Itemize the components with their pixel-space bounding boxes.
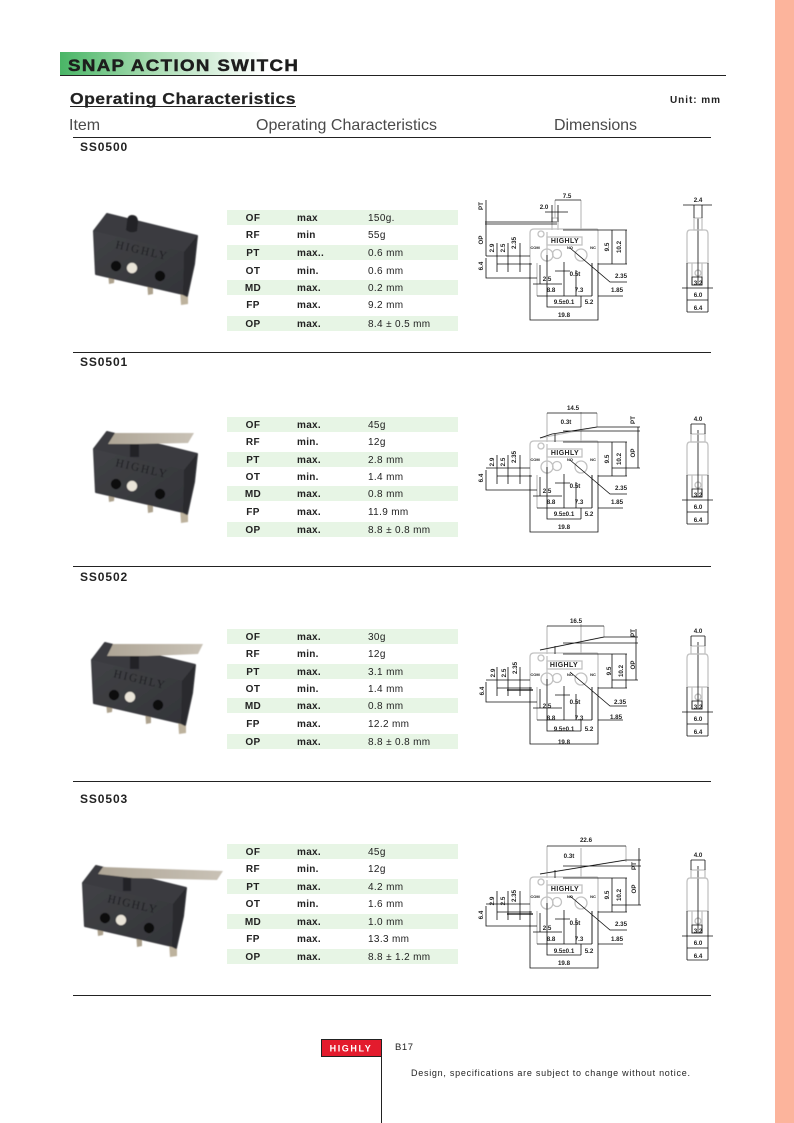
spec table: FP (246, 719, 260, 730)
dimension drawing: front: 2.9 (490, 668, 497, 677)
dimension drawing: front: 9.5 (604, 890, 611, 899)
spec table: OF (246, 420, 260, 431)
spec table: 13.3 mm (368, 934, 409, 945)
product: SS0503 (80, 792, 713, 968)
dimension drawing: front: OP (478, 236, 485, 244)
spec table: min. (297, 864, 319, 875)
model label: SS0500 (80, 140, 128, 154)
dimension drawing: front: 0.3t (561, 419, 571, 426)
dimension drawing: front: 10.2 (616, 452, 623, 465)
dimension drawing: front: OP (631, 885, 638, 893)
spec table: min. (297, 684, 319, 695)
dimension drawing: front: 2.5 (543, 276, 552, 283)
section title: Operating Characteristics (70, 90, 296, 108)
dimension drawing: front: 6.4 (478, 261, 485, 270)
spec table: 0.8 mm (368, 701, 403, 712)
dimension drawing: front: 1.85 (610, 714, 623, 721)
spec table: min. (297, 649, 319, 660)
spec table: min. (297, 437, 319, 448)
dimension drawing: front: 1.85 (611, 936, 624, 943)
disclaimer: Design, specifications are subject to change without notice. (411, 1068, 690, 1078)
spec table: MD (245, 489, 261, 500)
spec table: PT (246, 882, 260, 893)
spec table: max. (297, 917, 321, 928)
dimension drawing: front: 2.35 (615, 921, 628, 928)
banner heading: SNAP ACTION SWITCH (68, 56, 298, 75)
photo: switch with plunger: HIGHLY (114, 239, 168, 263)
spec table: 8.4 ± 0.5 mm (368, 319, 430, 330)
dimension drawing: side (682, 416, 713, 524)
dimension drawing: side: 3.2 (694, 492, 703, 499)
spec table: 2.8 mm (368, 455, 403, 466)
spec table: MD (245, 917, 261, 928)
spec table: max. (297, 737, 321, 748)
dimension drawing: side: 6.0 (694, 292, 703, 299)
dimension drawing: front: 8.8 (547, 715, 556, 722)
dimension drawing: side: 2.4 (694, 197, 703, 204)
spec table: max. (297, 701, 321, 712)
spec table: 0.6 mm (368, 266, 403, 277)
dimension drawing: front: 2.5 (543, 925, 552, 932)
dimension drawing: side: 6.4 (694, 729, 703, 736)
column headers: Dimensions (554, 117, 637, 134)
spec table: 1.4 mm (368, 472, 403, 483)
dimension drawing: front: 2.9 (489, 457, 496, 466)
spec table: FP (246, 507, 260, 518)
dimension drawing: front: 5.2 (585, 726, 594, 733)
model label: SS0503 (80, 792, 128, 806)
spec table: 9.2 mm (368, 300, 403, 311)
spec table: 45g (368, 420, 386, 431)
dimension drawing: front (478, 193, 628, 320)
photo: switch with medium lever (92, 643, 203, 734)
spec table: OT (246, 684, 260, 695)
dimension drawing: side: 4.0 (694, 416, 703, 423)
spec table: RF (246, 230, 260, 241)
dimension drawing: side (682, 852, 713, 960)
dimension drawing: front: COM (530, 672, 540, 677)
spec table: OP (245, 319, 261, 330)
dimension drawing: side: 6.0 (694, 504, 703, 511)
dimension drawing: front (479, 618, 638, 746)
spec table: min (297, 230, 316, 241)
dimension drawing: front: 2.0 (540, 204, 549, 211)
dimension drawing: front: 5.2 (585, 299, 594, 306)
dimension drawing: side (682, 628, 713, 736)
dimension drawing: front: 7.3 (575, 715, 584, 722)
dimension drawing: side: 6.4 (694, 305, 703, 312)
spec table: 1.4 mm (368, 684, 403, 695)
dimension drawing: front: 9.5±0.1 (554, 511, 575, 518)
spec table: max. (297, 934, 321, 945)
spec table: 0.2 mm (368, 283, 403, 294)
dimension drawing: front: 16.5 (570, 618, 583, 625)
spec table: 55g (368, 230, 386, 241)
dimension drawing: front: 2.5 (543, 703, 552, 710)
dimension drawing: front: 7.3 (575, 936, 584, 943)
spec table: RF (246, 437, 260, 448)
dimension drawing: side: 3.2 (694, 704, 703, 711)
spec table: FP (246, 934, 260, 945)
dimension drawing: front: 2.5 (500, 896, 507, 905)
dimension drawing: front: 10.2 (616, 888, 623, 901)
dimension drawing: front: NO (567, 457, 573, 462)
spec table: 12g (368, 864, 386, 875)
dimension drawing: front: 1.85 (611, 287, 624, 294)
dimension drawing: front: 2.35 (511, 236, 518, 249)
dimension drawing: front: 9.5 (604, 242, 611, 251)
banner heading (60, 52, 726, 76)
dimension drawing: front: 19.8 (558, 312, 571, 319)
dimension drawing: front (478, 837, 641, 968)
dimension drawing: front: 6.4 (478, 473, 485, 482)
spec table: PT (246, 667, 260, 678)
photo: switch with long lever (83, 866, 223, 957)
dimension drawing: side: 3.2 (694, 928, 703, 935)
dimension drawing: side (682, 197, 713, 312)
spec table: OT (246, 899, 260, 910)
dimension drawing: side: 6.0 (694, 716, 703, 723)
dimension drawing: front: COM (530, 457, 540, 462)
spec table: 12g (368, 649, 386, 660)
spec table: max. (297, 507, 321, 518)
spec table: max. (297, 283, 321, 294)
spec table: 45g (368, 847, 386, 858)
spec table: OP (245, 525, 261, 536)
dimension drawing: front: NC (590, 457, 596, 462)
dimension drawing: front: 0.3t (564, 853, 574, 860)
dimension drawing: front: 7.5 (563, 193, 572, 200)
dimension drawing: front: NO (567, 894, 573, 899)
column headers: Item (69, 117, 100, 134)
dimension drawing: front: 19.8 (558, 739, 571, 746)
spec table: OT (246, 472, 260, 483)
spec table: max. (297, 525, 321, 536)
spec table: OT (246, 266, 260, 277)
column headers: Operating Characteristics (256, 117, 437, 134)
dimension drawing: side: 6.0 (694, 940, 703, 947)
dimension drawing: front: PT (631, 862, 638, 870)
dimension drawing: front: HIGHLY (551, 238, 579, 245)
dimension drawing: side: 6.4 (694, 953, 703, 960)
side strip (775, 0, 794, 1123)
spec table: FP (246, 300, 260, 311)
spec table: max. (297, 319, 321, 330)
spec table: max. (297, 667, 321, 678)
spec table: max. (297, 489, 321, 500)
dimension drawing: front: COM (530, 894, 540, 899)
spec table: max. (297, 455, 321, 466)
page number: B17 (395, 1042, 413, 1053)
dimension drawing: front: PT (630, 629, 637, 637)
dimension drawing: front: NC (590, 894, 596, 899)
dimension drawing: front: 2.5 (500, 457, 507, 466)
product: SS0501 (80, 355, 713, 537)
dimension drawing: front: 9.5±0.1 (554, 948, 575, 955)
dimension drawing: front: 2.35 (615, 485, 628, 492)
spec table: max. (297, 882, 321, 893)
product: SS0500 (80, 140, 713, 331)
photo: switch with medium lever: HIGHLY (112, 668, 166, 692)
dimension drawing: front: 19.8 (558, 524, 571, 531)
spec table: max. (297, 420, 321, 431)
dimension drawing: front: NO (567, 672, 573, 677)
spec table: MD (245, 701, 261, 712)
photo: switch with plunger (94, 214, 197, 305)
dimension drawing: front: HIGHLY (551, 886, 579, 893)
unit note: Unit: mm (670, 95, 720, 106)
dimension drawing: front: COM (530, 245, 540, 250)
spec table: OP (245, 737, 261, 748)
model label: SS0502 (80, 570, 128, 584)
spec table: MD (245, 283, 261, 294)
spec table: 8.8 ± 0.8 mm (368, 525, 430, 536)
dimension drawing: front: 7.3 (575, 499, 584, 506)
spec table: RF (246, 649, 260, 660)
dimension drawing: front: OP (630, 449, 637, 457)
dimension drawing: front: HIGHLY (551, 450, 579, 457)
dimension drawing: front: 5.2 (585, 948, 594, 955)
dimension drawing: front: 0.5t (570, 699, 580, 706)
dimension drawing: front: 2.5 (500, 243, 507, 252)
dimension drawing: front: 2.9 (489, 243, 496, 252)
spec table: min. (297, 472, 319, 483)
spec table: 150g. (368, 213, 395, 224)
spec table: max. (297, 300, 321, 311)
spec table: PT (246, 455, 260, 466)
spec table: min. (297, 266, 319, 277)
spec table: RF (246, 864, 260, 875)
product: SS0502 (80, 570, 713, 749)
dimension drawing: front: 2.5 (543, 488, 552, 495)
dimension drawing: front: 10.2 (618, 664, 625, 677)
dimension drawing: front: 1.85 (611, 499, 624, 506)
spec table: 1.0 mm (368, 917, 403, 928)
spec table: 4.2 mm (368, 882, 403, 893)
spec table: 8.8 ± 0.8 mm (368, 737, 430, 748)
dimension drawing: front: 6.4 (479, 686, 486, 695)
spec table: max. (297, 952, 321, 963)
dimension drawing: front: 22.6 (580, 837, 593, 844)
spec table: 3.1 mm (368, 667, 403, 678)
dimension drawing: front: 2.35 (511, 450, 518, 463)
spec table: OF (246, 847, 260, 858)
dimension drawing: front: 2.35 (511, 889, 518, 902)
spec table: 0.6 mm (368, 248, 403, 259)
spec table (227, 210, 458, 331)
dimension drawing: front: 0.5t (570, 271, 580, 278)
spec table: min. (297, 899, 319, 910)
dimension drawing: front: 2.5 (501, 668, 508, 677)
spec table: OF (246, 213, 260, 224)
brand logo: HIGHLY (330, 1044, 372, 1054)
dimension drawing: front: 2.35 (614, 699, 627, 706)
dimension drawing: front: 2.9 (489, 896, 496, 905)
dimension drawing: front (478, 405, 640, 532)
dimension drawing: side: 3.2 (694, 280, 703, 287)
column headers (69, 117, 637, 134)
dimension drawing: front: 5.2 (585, 511, 594, 518)
dimension drawing: front: 9.5 (606, 666, 613, 675)
dimension drawing: front: NC (590, 245, 596, 250)
dimension drawing: front: PT (478, 202, 485, 210)
dimension drawing: front: NC (590, 672, 596, 677)
dimension drawing: front: NO (567, 245, 573, 250)
dimension drawing: front: 8.8 (547, 287, 556, 294)
brand logo (322, 1040, 382, 1056)
dimension drawing: front: 9.5±0.1 (554, 299, 575, 306)
spec table: 12.2 mm (368, 719, 409, 730)
spec table: 8.8 ± 1.2 mm (368, 952, 430, 963)
dimension drawing: side: 4.0 (694, 628, 703, 635)
spec table: OP (245, 952, 261, 963)
spec table (227, 844, 458, 964)
dimension drawing: front: 8.8 (547, 936, 556, 943)
dimension drawing: side: 6.4 (694, 517, 703, 524)
dimension drawing: front: 8.8 (547, 499, 556, 506)
spec table: 12g (368, 437, 386, 448)
dimension drawing: front: 7.3 (575, 287, 584, 294)
dimension drawing: front: OP (630, 661, 637, 669)
spec table: max.. (297, 248, 324, 259)
dimension drawing: front: HIGHLY (550, 662, 578, 669)
spec table: 0.8 mm (368, 489, 403, 500)
spec table: PT (246, 248, 260, 259)
spec table: max (297, 213, 318, 224)
spec table: OF (246, 632, 260, 643)
photo: switch with short lever: HIGHLY (114, 457, 168, 481)
dimension drawing: front: 6.4 (478, 910, 485, 919)
dimension drawing: front: 2.35 (615, 273, 628, 280)
dimension drawing: front: 9.5±0.1 (554, 726, 575, 733)
spec table (227, 417, 458, 537)
dimension drawing: side: 4.0 (694, 852, 703, 859)
dimension drawing: front: 19.8 (558, 960, 571, 967)
spec table (227, 629, 458, 749)
spec table: 30g (368, 632, 386, 643)
spec table: 1.6 mm (368, 899, 403, 910)
photo: switch with long lever: HIGHLY (106, 893, 158, 916)
model label: SS0501 (80, 355, 128, 369)
spec table: max. (297, 719, 321, 730)
dimension drawing: front: 0.5t (570, 920, 580, 927)
dimension drawing: front: 2.35 (512, 661, 519, 674)
dimension drawing: front: 0.5t (570, 483, 580, 490)
photo: switch with short lever (94, 432, 197, 523)
dimension drawing: front: PT (630, 416, 637, 424)
spec table: max. (297, 632, 321, 643)
spec table: 11.9 mm (368, 507, 409, 518)
spec table: max. (297, 847, 321, 858)
dimension drawing: front: 10.2 (616, 240, 623, 253)
dimension drawing: front: 14.5 (567, 405, 580, 412)
dimension drawing: front: 9.5 (604, 454, 611, 463)
